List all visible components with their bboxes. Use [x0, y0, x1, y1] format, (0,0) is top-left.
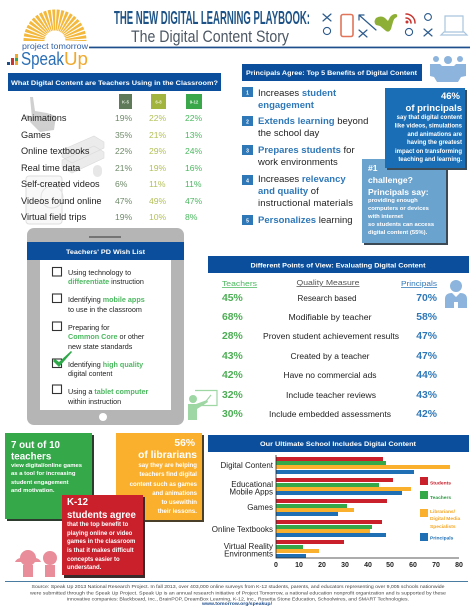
legend: Digital Media	[430, 516, 460, 522]
table: digital content use by grade: 6%	[115, 179, 128, 189]
panel: teachers PD wish list tablet: digital content	[68, 369, 112, 378]
bar chart: ultimate school: Environments	[224, 550, 273, 558]
callout: 46% of principals: say that digital content	[397, 115, 462, 121]
table: digital content use by grade: 29%	[149, 146, 167, 156]
panel: teachers PD wish list tablet: Preparing for	[68, 323, 110, 332]
title: THE NEW DIGITAL LEARNING PLAYBOOK:	[114, 8, 310, 28]
panel: principals benefits heading: Principals Agree: Top 5 Benefits of Digital Content	[246, 70, 418, 77]
heading: ultimate school: Our Ultimate School Includes Digital Content	[260, 441, 417, 448]
callout: #1 challenge: computers or devices	[368, 206, 430, 212]
callout: 56% of librarians: teachers find digital	[139, 471, 197, 478]
list: top 5 benefits: instructional materials	[258, 198, 353, 209]
table: teachers vs principals quality measures: Proven student achievement results	[263, 332, 399, 341]
table: digital content use by grade: 21%	[149, 130, 167, 140]
callout: 56% of librarians: and animations	[152, 490, 198, 497]
callout: 7 out of 10 teachers: student engagement	[11, 480, 69, 486]
callout: 46% of principals: and animations are	[407, 132, 463, 138]
table: digital content use by grade: 19%	[149, 163, 167, 173]
table: teachers vs principals quality measures: Principals	[401, 279, 437, 288]
source footnote: innovative companies: Blackboard, Inc., BrainPOP, DreamBox Learning, K-12, Inc., Rosetta Stone Education, Schoolwires, and SMART Technologies.	[67, 596, 409, 602]
logo: Project Tomorrow Speak Up: Up	[64, 48, 88, 69]
panel: teachers PD wish list tablet: within instruction	[67, 397, 121, 406]
callout: 46% of principals: 46%	[441, 91, 461, 102]
callout: K-12 students agree: games in the classroom	[67, 539, 135, 545]
panel: teachers PD wish list tablet: to use in the classroom	[68, 305, 142, 314]
table: digital content use by grade	[21, 94, 203, 222]
callout: #1 challenge: #1	[368, 163, 378, 173]
logo: Project Tomorrow Speak Up	[7, 20, 88, 69]
bar chart: ultimate school: 40	[364, 562, 372, 569]
callout: 56% of librarians: of librarians	[138, 450, 197, 461]
table: teachers vs principals quality measures: 43%	[416, 390, 437, 401]
list: top 5 benefits: Prepares students for	[258, 145, 355, 156]
icon: group of people	[430, 56, 466, 82]
table: digital content use by grade: 47%	[115, 196, 133, 206]
table: digital content use by grade: Games	[21, 130, 51, 140]
table: teachers vs principals quality measures: 28%	[222, 331, 243, 342]
bar chart: ultimate school: 0	[274, 562, 278, 569]
callout: 46% of principals: like videos, simulations	[395, 124, 463, 130]
table: digital content use by grade: 19%	[115, 113, 133, 123]
table: digital content use by grade: Animations	[21, 113, 67, 123]
table: teachers vs principals quality measures: Research based	[298, 294, 356, 303]
bar chart: ultimate school: Educational	[231, 480, 273, 489]
source footnote: were submitted through the Speak Up Project. Speak Up is an annual research initiative of Project Tomorrow, a national education nonprofit organization and is supported by these	[30, 590, 446, 596]
callout: 56% of librarians: 56%	[174, 438, 195, 449]
logo: Project Tomorrow Speak Up: Speak	[21, 48, 65, 69]
callout: 46% of principals: of principals	[406, 103, 462, 114]
panel: teachers PD wish list tablet: Using a tablet computer	[68, 387, 148, 396]
table: digital content use by grade: Virtual field trips	[21, 212, 87, 222]
table: digital content use by grade: 47%	[185, 196, 203, 206]
callout: 7 out of 10 teachers: teachers	[11, 452, 52, 462]
table: teachers vs principals quality measures: 32%	[222, 390, 243, 401]
list: top 5 benefits: Personalizes learning	[258, 215, 353, 226]
table: digital content use by grade: 35%	[115, 130, 133, 140]
bar chart: ultimate school: 20	[318, 562, 326, 569]
list: top 5 benefits: Extends learning beyond	[258, 116, 368, 127]
callout: 7 out of 10 teachers	[5, 433, 94, 521]
legend: Students	[430, 480, 451, 486]
callout: 56% of librarians: their lessons.	[158, 508, 197, 515]
legend: Librarians/	[430, 509, 456, 515]
legend: Teachers	[430, 495, 451, 501]
callout: 46% of principals	[385, 88, 467, 170]
list: top 5 benefits: Increases student	[258, 88, 337, 99]
callout: K-12 students agree: K-12	[67, 497, 88, 508]
bar chart: ultimate school: 70	[432, 562, 440, 569]
source footnote	[30, 584, 446, 607]
callout: #1 challenge	[362, 159, 448, 245]
callout: 56% of librarians: content such as games	[130, 481, 198, 488]
callout: K-12 students agree: is that it makes difficult	[67, 548, 134, 554]
table: teachers vs principals quality measures: 45%	[222, 293, 243, 304]
table: teachers vs principals quality measures: 42%	[416, 409, 437, 420]
panel: teachers PD wish list tablet	[27, 228, 184, 425]
legend: Principals	[430, 536, 454, 542]
source footnote: www.tomorrow.org/speakup/	[201, 601, 273, 607]
callout: #1 challenge: providing enough	[368, 198, 418, 204]
table: teachers vs principals quality measures: 47%	[416, 351, 437, 362]
legend	[420, 477, 460, 542]
table: digital content use by grade: 16%	[185, 163, 203, 173]
table: teachers vs principals quality measures: 47%	[416, 331, 437, 342]
callout: 56% of librarians	[116, 433, 204, 522]
table: digital content use by grade: 11%	[185, 179, 202, 189]
table: teachers vs principals quality measures: Teachers	[222, 279, 257, 288]
list: top 5 benefits: work environments	[257, 157, 338, 168]
panel: teachers PD wish list tablet: Using technology to	[68, 268, 131, 277]
callout: K-12 students agree: concepts easier to	[67, 557, 120, 563]
list: top 5 benefits	[242, 87, 368, 226]
table: digital content use by grade: 22%	[115, 146, 133, 156]
source footnote: Source: Speak Up 2013 National Research Project. In fall 2013, over 403,000 online surveys from K-12 students, parents, and educators representing over 9,005 schools nationwide	[32, 584, 445, 590]
callout: 56% of librarians: to usewithin	[161, 499, 197, 506]
list: top 5 benefits: the school day	[258, 128, 320, 139]
bar chart: ultimate school: Digital Content	[221, 461, 274, 470]
heading: ultimate school	[208, 435, 469, 452]
table: teachers vs principals quality measures: 68%	[222, 312, 243, 323]
table: digital content use by grade: 49%	[149, 196, 167, 206]
bar chart: ultimate school: 10	[295, 562, 303, 569]
panel: teachers PD wish list tablet: Identifying mobile apps	[68, 295, 145, 304]
icon: teacher at board	[188, 390, 217, 420]
callout: 7 out of 10 teachers: and motivation.	[11, 488, 55, 494]
callout: K-12 students agree: students agree	[67, 510, 137, 521]
panel: teachers PD wish list tablet: differentiate instruction	[68, 277, 144, 286]
bar chart: ultimate school: Mobile Apps	[229, 488, 273, 496]
callout: #1 challenge: digital content (55%).	[368, 230, 428, 236]
callout: 46% of principals: teaching and learning.	[398, 157, 462, 163]
table: digital content use by grade: 11%	[149, 179, 166, 189]
table: digital content use by grade: 6-8	[155, 100, 162, 104]
bar chart: ultimate school: 30	[341, 562, 349, 569]
callout: 56% of librarians: say they are helping	[138, 462, 197, 469]
table: digital content use by grade: 19%	[115, 212, 133, 222]
bar chart: ultimate school: Online Textbooks	[212, 525, 273, 534]
bar chart: ultimate school: Games	[247, 503, 273, 512]
heading: different points of view	[208, 256, 469, 273]
table: digital content use by grade: Real time data	[21, 163, 81, 173]
callout: #1 challenge: Principals say:	[368, 187, 429, 197]
table: teachers vs principals quality measures: 70%	[416, 293, 437, 304]
table: digital content use by grade: 13%	[185, 130, 203, 140]
bar chart: ultimate school: 80	[455, 562, 463, 569]
table: digital content use by grade: Self-created videos	[21, 179, 100, 189]
callout: K-12 students agree	[62, 495, 145, 578]
callout: 7 out of 10 teachers: 7 out of 10	[11, 440, 61, 451]
bar chart: ultimate school: Virtual Reality	[224, 542, 273, 551]
icons: playbook marks and devices	[323, 14, 467, 37]
bar chart: ultimate school: 60	[409, 562, 417, 569]
bar chart: ultimate school	[212, 455, 463, 569]
table: teachers vs principals quality measures: 58%	[416, 312, 437, 323]
table: digital content use by grade: 24%	[185, 146, 203, 156]
icon: green check mark	[53, 351, 72, 367]
table: teachers vs principals quality measures: 30%	[222, 409, 243, 420]
table: digital content use by grade: Online textbooks	[21, 146, 90, 156]
callout: K-12 students agree: playing online or video	[67, 531, 133, 537]
panel: teachers PD wish list tablet: Common Core or other	[68, 332, 145, 341]
icon: principal person	[445, 280, 467, 308]
callout: 46% of principals: impact on transforming	[395, 149, 462, 155]
heading: what digital content: What Digital Content are Teachers Using in the Classroom?	[11, 80, 218, 87]
list: top 5 benefits: and quality of	[258, 186, 319, 197]
table: teachers vs principals quality measures: Quality Measure	[296, 278, 360, 287]
table: teachers vs principals quality measures: 43%	[222, 351, 243, 362]
table: digital content use by grade: K-5	[122, 100, 130, 104]
table: teachers vs principals quality measures: Include embedded assessments	[269, 410, 391, 419]
background icons: hand, books, phone	[25, 97, 104, 224]
list: top 5 benefits: 4	[246, 178, 249, 184]
table: teachers vs principals quality measures: 42%	[222, 370, 243, 381]
panel: principals benefits heading	[242, 64, 422, 81]
heading: different points of view: Different Points of View: Evaluating Digital Content	[250, 262, 426, 270]
table: digital content use by grade: 9-12	[190, 100, 199, 104]
list: top 5 benefits: 5	[246, 218, 249, 224]
title	[114, 8, 310, 46]
icon: students	[15, 550, 57, 577]
table: digital content use by grade: 10%	[149, 212, 167, 222]
table: teachers vs principals quality measures: Have no commercial ads	[284, 371, 376, 380]
table: teachers vs principals quality measures	[222, 278, 437, 420]
table: teachers vs principals quality measures: Include teacher reviews	[286, 391, 376, 400]
table: digital content use by grade: 21%	[115, 163, 133, 173]
logo: Project Tomorrow Speak Up: project tomorrow	[22, 42, 88, 51]
list: top 5 benefits: engagement	[258, 100, 315, 111]
table: digital content use by grade: 8%	[185, 212, 198, 222]
callout: #1 challenge: so students can access	[368, 222, 435, 228]
bar chart: ultimate school: 50	[386, 562, 394, 569]
callout: K-12 students agree: that the top benefit to	[67, 522, 129, 528]
callout: K-12 students agree: understand.	[67, 565, 102, 571]
list: top 5 benefits: 3	[246, 148, 249, 154]
callout: 7 out of 10 teachers: as a tool for increasing	[11, 471, 76, 477]
list: top 5 benefits: 2	[246, 120, 249, 126]
heading: what digital content	[8, 73, 221, 91]
list: top 5 benefits: 1	[246, 90, 249, 96]
table: digital content use by grade: Videos found online	[21, 196, 102, 206]
list: top 5 benefits: Increases relevancy	[258, 174, 346, 185]
table: teachers vs principals quality measures: Modifiable by teacher	[288, 313, 372, 322]
callout: #1 challenge: challenge?	[368, 175, 413, 185]
callout: 7 out of 10 teachers: view digital/online games	[11, 463, 83, 469]
title: The Digital Content Story	[131, 27, 289, 46]
callout: #1 challenge: with internet	[367, 214, 403, 220]
panel: teachers PD wish list tablet: Teachers' PD Wish List	[66, 249, 146, 256]
callout: 46% of principals: having the greatest	[407, 140, 462, 146]
legend: Specialists	[430, 524, 456, 530]
table: digital content use by grade: 22%	[185, 113, 203, 123]
table: digital content use by grade: 22%	[149, 113, 167, 123]
panel: teachers PD wish list tablet: new state standards	[68, 342, 133, 351]
table: teachers vs principals quality measures: Created by a teacher	[290, 352, 370, 361]
table: teachers vs principals quality measures: 44%	[416, 370, 437, 381]
panel: teachers PD wish list tablet: Identifying high quality	[68, 360, 143, 369]
